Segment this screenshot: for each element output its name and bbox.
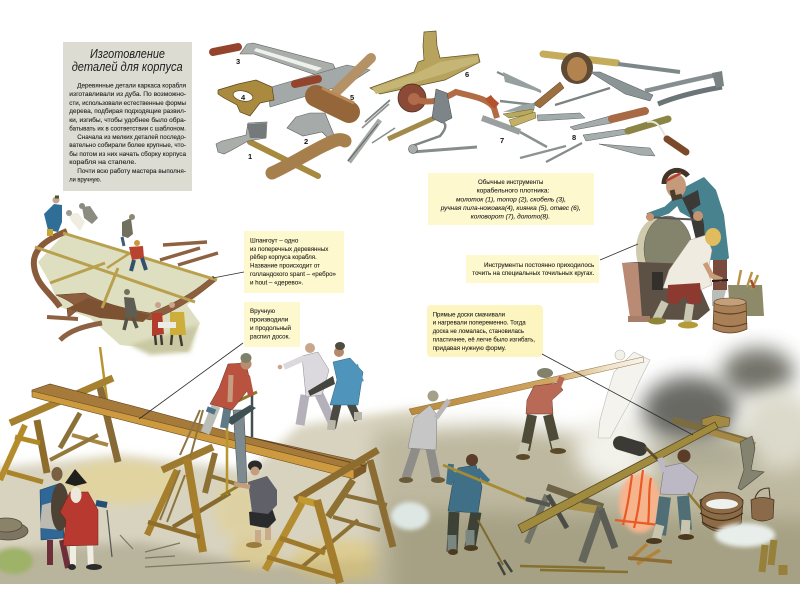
intro text block xyxy=(69,82,186,184)
icon: hand auger xyxy=(497,52,680,105)
walking worker in white xyxy=(278,343,335,425)
callout: hand sawing: распил досок. xyxy=(250,334,290,340)
bottom white margin xyxy=(0,584,800,600)
worker with broom xyxy=(620,443,708,544)
illustration: grinding wheel workers xyxy=(622,170,764,333)
tool numbers: 2 xyxy=(304,137,308,146)
callout: frame definition: Шпангоут – одно xyxy=(250,238,299,244)
callout: common tools: Обычные инструменты xyxy=(478,178,543,186)
illustration: ship frame being assembled xyxy=(34,196,218,355)
callout: frame definition: из поперечных деревянных xyxy=(250,246,329,253)
trestle under bent plank xyxy=(527,487,615,562)
arrow: sharpening callout leader xyxy=(600,244,638,260)
callout: common tools: ручная пила-ножовка(4), киянка (5), отвес (6), xyxy=(440,205,581,212)
icon: hand saw 4 xyxy=(218,65,370,116)
middle sawhorse front xyxy=(147,410,213,552)
tool numbers xyxy=(236,57,576,161)
icon: brace 7 xyxy=(398,84,547,147)
heading: Изготовление xyxy=(90,47,165,61)
callout: sharpening tools: точить на специальных точильных кругах. xyxy=(472,270,594,277)
gentleman in blue xyxy=(40,467,69,568)
fire xyxy=(615,470,661,533)
worker below the plank xyxy=(234,460,277,548)
ship frame beams xyxy=(35,233,217,308)
icon: pincers xyxy=(645,71,724,104)
icon: hammer 1 xyxy=(216,122,318,176)
bending frame xyxy=(673,415,764,490)
callout: hand sawing: Вручную xyxy=(250,308,275,315)
callout: common tools: молоток (1), топор (2), скобель (3), xyxy=(456,196,566,204)
green bush xyxy=(0,548,33,574)
water bucket xyxy=(751,488,774,521)
illustration: sawing workshop xyxy=(0,342,393,583)
carrier, middle in red xyxy=(516,368,566,460)
middle sawhorse back parts xyxy=(173,453,240,527)
left puddle xyxy=(391,502,429,530)
apprentice sharpening xyxy=(648,228,728,328)
callout: steaming planks: доска не ломалась, становилась xyxy=(433,328,524,335)
callout: hand sawing: и продольный xyxy=(250,324,291,332)
icon: mallet 5 xyxy=(316,58,371,112)
icon: small hammer and compass xyxy=(348,89,477,162)
ground poles and tool xyxy=(478,520,783,575)
tool numbers: 3 xyxy=(236,57,240,66)
callout: hand sawing: производили xyxy=(250,316,289,324)
callout: frame definition xyxy=(244,231,344,293)
callout: frame definition: Название происходит от xyxy=(250,262,320,270)
callout: steaming planks: Прямые доски смачивали xyxy=(433,312,505,318)
sticks on the ground xyxy=(120,535,250,567)
worker at lever xyxy=(443,454,550,555)
intro text block: изготавливали из дуба. По возможно- xyxy=(69,90,186,98)
icon: plane xyxy=(500,72,564,112)
intro text block: Почти всю работу мастера выполня- xyxy=(77,167,186,175)
worker above on plank xyxy=(205,353,252,433)
wooden tub xyxy=(713,298,747,333)
callout: sharpening tools xyxy=(466,255,599,283)
tool numbers: 6 xyxy=(465,70,469,79)
plank carried on shoulders xyxy=(409,357,644,415)
callout: steaming planks: и нагревали попеременно. Тогда xyxy=(433,320,526,326)
firewood pile xyxy=(628,544,672,564)
carrier, left xyxy=(399,390,449,483)
intro text block: ки, изгибы, чтобы удобнее было обра- xyxy=(69,116,186,124)
tool numbers: 1 xyxy=(248,152,252,161)
icon: plumb level 6 xyxy=(370,31,480,94)
callout: frame definition: и hout – «дерево». xyxy=(250,280,303,286)
people around the frame xyxy=(44,196,186,346)
master sharpening xyxy=(646,170,729,306)
gentleman in red coat xyxy=(60,469,112,570)
intro text block: ли вручную. xyxy=(69,176,101,184)
icon: chisels 8 xyxy=(503,109,686,162)
ship frame hull xyxy=(34,231,217,322)
arrow: frame callout leader xyxy=(213,272,244,278)
left sawhorse xyxy=(0,347,118,482)
grinding stone xyxy=(636,216,692,283)
callout: frame definition: голландского spant – «ребро» xyxy=(250,270,336,278)
right sawhorse front xyxy=(265,450,378,583)
tool numbers: 7 xyxy=(500,136,504,145)
callout: steaming planks xyxy=(427,305,543,357)
callout: frame definition: рёбер корпуса корабля. xyxy=(250,253,317,261)
callout: common tools: коловорот (7), долото(8). xyxy=(471,212,550,220)
ship frame floor xyxy=(38,234,217,355)
pale carrier in steam xyxy=(598,350,650,438)
illustration: ground of sawing scene xyxy=(0,408,430,600)
icon: axe 2 xyxy=(272,113,345,173)
grinder stand xyxy=(622,262,710,322)
tool numbers: 5 xyxy=(350,93,354,102)
arrow: sawing callout leader xyxy=(139,343,243,419)
arrow: steaming callout leader xyxy=(542,354,693,435)
illustration: carpenter's tools, right group xyxy=(497,52,724,162)
tool numbers: 4 xyxy=(241,93,246,102)
panel: title and intro xyxy=(63,42,192,191)
illustration: carpenter's tools, left group xyxy=(213,31,547,176)
intro text block: вательно собирали более крупные, что- xyxy=(69,141,186,149)
bent plank xyxy=(518,422,718,533)
tool numbers: 8 xyxy=(572,133,576,142)
loose timbers xyxy=(47,242,218,340)
callout: hand sawing xyxy=(244,302,300,347)
walking worker in blue xyxy=(330,342,363,430)
intro text block: дерева, подбирая подходящие развил- xyxy=(69,107,186,115)
illustration: plank bending workshop xyxy=(391,350,783,575)
callout: common tools: корабельного плотника: xyxy=(477,187,549,195)
callout: sharpening tools: Инструменты постоянно приходилось xyxy=(484,262,595,269)
callout: steaming planks: придавая нужную форму. xyxy=(433,345,506,352)
intro text block: Сначала из мелких деталей последо- xyxy=(77,133,186,141)
icon: drawknife 3 xyxy=(213,43,336,78)
intro text block: сти, использовали естественные формы xyxy=(69,100,186,107)
illustration: smoke and steam xyxy=(575,348,800,485)
heading xyxy=(72,47,183,74)
intro text block: бы потом из них начать сборку корпуса xyxy=(69,150,186,158)
intro text block: Деревянные детали каркаса корабля xyxy=(77,82,186,90)
water tub xyxy=(700,492,743,532)
heading: деталей для корпуса xyxy=(72,60,183,74)
long plank on trestles xyxy=(32,384,367,479)
intro text block: батывать их в соответствии с шаблоном. xyxy=(69,124,186,132)
callout: common tools xyxy=(428,173,594,225)
pit saw xyxy=(221,392,257,496)
right sawhorse back parts xyxy=(302,460,393,567)
intro text block: корабля на стапеле. xyxy=(69,158,136,166)
spilled water xyxy=(715,523,775,547)
rope coil xyxy=(0,518,28,540)
tool box xyxy=(728,270,764,316)
callout: steaming planks: пластичнее, её легче было изгибать, xyxy=(433,336,535,344)
illustration: ground of bending scene xyxy=(375,425,800,600)
